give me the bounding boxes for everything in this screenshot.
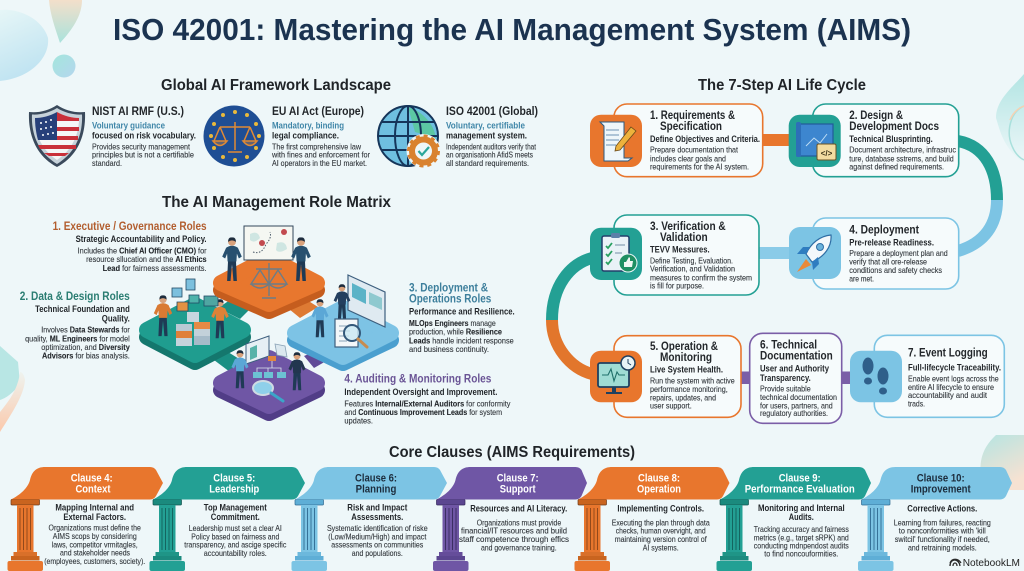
pillar bbox=[292, 500, 327, 571]
text: step 2: Technical Blusprinting. bbox=[849, 134, 933, 144]
text: clause 6: and populations. bbox=[352, 549, 403, 558]
text: clause 9: conducting mdnpendost audits bbox=[754, 542, 849, 551]
icon: document and pencil bbox=[590, 115, 642, 167]
banner bbox=[436, 467, 587, 500]
pillar bbox=[858, 500, 894, 571]
text: step 1: Specification bbox=[660, 121, 722, 133]
text: clause 7 bbox=[459, 504, 569, 552]
icon: floating data cards bbox=[172, 279, 218, 311]
text: clause 5 bbox=[184, 503, 286, 558]
label: ISO text: management system. bbox=[446, 130, 527, 140]
icon: globe and gear bbox=[378, 106, 440, 168]
text: clause 6: Assessments. bbox=[351, 512, 403, 522]
figure: two data staff bbox=[154, 295, 229, 338]
text: step 7: Enable event logs across the bbox=[908, 374, 999, 383]
title: ISO 42001: Mastering the AI Management System (AIMS) bbox=[113, 12, 911, 47]
banner: Clause 7: bbox=[497, 473, 539, 485]
panel: role matrix diagram bbox=[147, 226, 391, 413]
icon: checklist and thumbs up bbox=[590, 228, 642, 280]
label: EU text: AI operators in the EU market. bbox=[272, 159, 367, 168]
icon: scales of accountability bbox=[251, 263, 287, 298]
text: clause 10: Learning from failures, reacting bbox=[894, 518, 991, 527]
role text: deployment and operations: Operations Roles bbox=[409, 294, 491, 306]
role text: deployment and operations: production, while Resilience bbox=[409, 328, 503, 337]
role text: data and design: Technical Foundation and bbox=[35, 304, 130, 314]
background blob: right bbox=[996, 74, 1024, 164]
icon: data blocks bbox=[176, 312, 210, 346]
text: clause 6: Systematic identification of riske bbox=[327, 524, 428, 533]
text: clause 10 bbox=[894, 504, 991, 552]
banner bbox=[295, 467, 447, 500]
role text: executive governance: Strategic Accountability and Policy. bbox=[76, 234, 207, 244]
text: step 6: Transparency. bbox=[760, 373, 811, 383]
label: NIST text: principles but is not a certifiable bbox=[92, 151, 195, 160]
figure: two operations staff bbox=[311, 284, 350, 337]
label: ISO text: all standard requirements. bbox=[446, 159, 529, 168]
icon: clipboard and magnifier bbox=[335, 319, 367, 347]
text: clause 5: transparency, and ascige specific bbox=[184, 541, 286, 550]
background blob: left bbox=[0, 346, 25, 432]
role text: auditing and monitoring: Features Internal/External Auditors for conformity bbox=[344, 399, 510, 408]
text: step 1: Define Objectives and Criteria. bbox=[650, 134, 760, 144]
heading: Core Clauses: Core Clauses (AIMS Requirements) bbox=[389, 444, 635, 461]
step 3: verification and validation bbox=[590, 215, 759, 295]
role text: deployment and operations bbox=[409, 283, 515, 354]
text: clause 4: Mapping Internal and bbox=[55, 503, 134, 513]
role text: auditing and monitoring: Independent Oversight and Improvement. bbox=[344, 387, 497, 397]
banner: Context bbox=[76, 484, 111, 496]
text: clause 7: financial/IT resources and build bbox=[461, 527, 567, 536]
clause 10: improvement bbox=[858, 467, 1012, 571]
icon: analytics screen bbox=[246, 336, 287, 364]
text: step 6 bbox=[760, 339, 837, 418]
clause 7: support bbox=[433, 467, 587, 571]
banner: Clause 9: bbox=[779, 473, 821, 485]
label: EU text bbox=[271, 106, 370, 168]
step 5: operation and monitoring bbox=[590, 336, 741, 417]
text: step 7: Full-lifecycle Traceability. bbox=[908, 363, 1001, 373]
text: step 7: trads. bbox=[908, 399, 925, 408]
icon: strategy whiteboard bbox=[244, 226, 293, 260]
role text: executive governance: resource sllucation and the AI Ethics bbox=[86, 255, 207, 264]
role text: auditing and monitoring bbox=[344, 374, 510, 426]
text: clause 9: Monitoring and Internal bbox=[758, 503, 845, 513]
role text: executive governance: 1. Executive / Governance Roles bbox=[53, 221, 207, 233]
banner bbox=[11, 467, 163, 500]
text: clause 4: Organizations must define the bbox=[49, 524, 141, 533]
role text: deployment and operations: Leads handle incident response bbox=[409, 336, 514, 345]
text: step 4: verify that all ore-release bbox=[849, 258, 928, 267]
role text: deployment and operations: Performance and Resilience. bbox=[409, 307, 515, 317]
connectors between role platforms bbox=[214, 300, 328, 372]
text: clause 10: to nonconformities with 'kill bbox=[899, 527, 986, 536]
text: step 5: Monitoring bbox=[660, 352, 712, 364]
icon: magnifier bbox=[253, 381, 283, 401]
text: step 5: Live System Health. bbox=[650, 365, 723, 375]
text: step 1: Prepare documentation that bbox=[650, 146, 739, 155]
icon: US flag shield bbox=[29, 105, 85, 167]
banner: Clause 5: bbox=[213, 473, 255, 485]
text: clause 6: assessments on communities bbox=[331, 541, 423, 550]
role text: data and design bbox=[20, 291, 130, 361]
text: step 5 bbox=[650, 341, 735, 411]
banner: Performance Evaluation bbox=[745, 484, 855, 496]
text: step 4: are met. bbox=[849, 275, 874, 284]
heading: The 7-Step AI Life Cycle: The 7-Step AI Life Cycle bbox=[698, 77, 866, 94]
label: EU text: with fines and enforcement for bbox=[271, 151, 370, 160]
banner: Support bbox=[500, 484, 536, 496]
banner: Clause 4: bbox=[71, 473, 113, 485]
panel: NIST AI RMF bbox=[29, 105, 196, 168]
text: step 3: Define Testing, Evaluation. bbox=[650, 256, 733, 265]
banner: Clause 8: bbox=[638, 473, 680, 485]
text: clause 8 bbox=[612, 504, 710, 552]
role text: deployment and operations: MLOps Engineers manage bbox=[409, 319, 496, 328]
clause 4: context bbox=[8, 467, 163, 571]
text: step 6: technical documentation bbox=[760, 393, 837, 402]
role text: deployment and operations: and business continuity. bbox=[409, 345, 489, 354]
icon: dashboard bbox=[348, 275, 385, 327]
text: clause 7: Organizations must provide bbox=[477, 519, 562, 528]
heading: The AI Management Role Matrix: The AI Management Role Matrix bbox=[162, 194, 391, 211]
label: EU text: Mandatory, binding bbox=[272, 120, 344, 130]
text: clause 7: staff competence through effics bbox=[459, 535, 569, 544]
text: step 3: Verification, and Validation bbox=[650, 265, 735, 274]
NotebookLM logo: NotebookLM bbox=[963, 557, 1020, 569]
text: step 4: 4. Deployment bbox=[849, 225, 919, 237]
role text: auditing and monitoring: updates. bbox=[344, 417, 373, 426]
text: clause 4: laws, competitor vrmitagles, bbox=[52, 540, 138, 549]
text: clause 6: Risk and Impact bbox=[347, 503, 407, 513]
banner bbox=[153, 467, 305, 500]
text: clause 4: and stakeholder needs bbox=[60, 549, 130, 558]
banner bbox=[862, 467, 1012, 500]
icon: footprints bbox=[850, 351, 902, 402]
step 4: deployment bbox=[789, 218, 959, 289]
role text: data and design: quality, ML Engineers for model bbox=[25, 334, 130, 343]
pillar bbox=[433, 500, 468, 571]
text: step 6: regulatory authorities. bbox=[760, 409, 828, 418]
banner: Planning bbox=[356, 484, 396, 496]
text: step 6: for users, partners, and bbox=[760, 401, 833, 410]
label: NIST text: focused on risk vocabulary. bbox=[92, 130, 196, 140]
figure: two executives bbox=[222, 237, 311, 281]
figure: two auditors bbox=[231, 350, 306, 390]
text: step 6: 6. Technical bbox=[760, 339, 817, 351]
text: step 2: against defined requirements. bbox=[849, 163, 944, 172]
pillar bbox=[150, 500, 185, 571]
text: step 1: requirements for the AI system. bbox=[650, 163, 749, 172]
role text: data and design: optimization, and Diversity bbox=[41, 343, 130, 352]
text: clause 4: (employees, customers, society). bbox=[44, 557, 145, 566]
label: NIST text: NIST AI RMF (U.S.) bbox=[92, 106, 184, 118]
text: step 3: TEVV Messures. bbox=[650, 244, 710, 254]
text: step 2: Development Docs bbox=[849, 121, 939, 133]
text: step 4: conditions and safety checks bbox=[849, 266, 942, 275]
text: step 3: 3. Verification & bbox=[650, 221, 726, 233]
text: step 2 bbox=[849, 110, 956, 172]
label: ISO text: Independent auditors verify that bbox=[446, 142, 537, 151]
text: clause 7: Resources and AI Literacy. bbox=[470, 504, 567, 514]
text: clause 5: accountability roles. bbox=[204, 549, 267, 558]
icon: EU scales bbox=[204, 106, 264, 166]
icon: monitor with heartbeat and clock bbox=[590, 351, 642, 402]
icon: org chart bbox=[253, 356, 286, 378]
banner: Leadership bbox=[209, 484, 260, 496]
step 6: technical documentation bbox=[750, 333, 842, 423]
role text: auditing and monitoring: 4. Auditing & Monitoring Roles bbox=[344, 374, 491, 386]
text: clause 9: Audits. bbox=[789, 512, 814, 522]
banner: Clause 6: bbox=[355, 473, 397, 485]
text: step 7: entire AI lifecycle to ensure bbox=[908, 383, 995, 392]
role text: executive governance: Includes the Chief AI Officer (CMO) for bbox=[78, 246, 207, 255]
text: clause 8: AI systems. bbox=[643, 543, 679, 552]
text: step 3: Validation bbox=[660, 232, 708, 244]
text: step 1: includes clear goals and bbox=[650, 154, 726, 163]
text: step 3: is fill for purpose. bbox=[650, 282, 704, 291]
text: step 7: accountability and audit bbox=[908, 391, 988, 400]
text: step 2: Document architecture, infrastruc bbox=[849, 146, 956, 155]
label: EU text: legal compliance. bbox=[272, 130, 339, 140]
text: clause 5: Policy based on fairness and bbox=[191, 532, 279, 541]
text: clause 9 bbox=[754, 503, 849, 559]
text: clause 4: AIMS scops by considering bbox=[53, 532, 137, 541]
text: clause 8: maintaining version control of bbox=[615, 535, 707, 544]
text: step 6: Documentation bbox=[760, 351, 833, 363]
text: clause 5: Commitment. bbox=[211, 512, 260, 522]
label: ISO text bbox=[446, 106, 538, 168]
text: step 5: Run the system with active bbox=[650, 376, 735, 385]
text: step 2: 2. Design & bbox=[849, 110, 903, 122]
label: ISO text: ISO 42001 (Global) bbox=[446, 106, 538, 118]
text: step 7 bbox=[908, 348, 1001, 408]
icon: blueprint and code: </> bbox=[821, 149, 833, 158]
clause 5: leadership bbox=[150, 467, 305, 571]
text: clause 9: Tracking accuracy and fairness bbox=[754, 525, 849, 534]
panel: EU AI Act bbox=[204, 106, 370, 168]
role text: executive governance: Lead for fairness assessments. bbox=[103, 264, 207, 273]
banner: Operation bbox=[637, 484, 681, 496]
text: step 5: repairs, updates, and bbox=[650, 393, 716, 402]
text: step 3: measures to confirm the system bbox=[650, 273, 752, 282]
platform: data and design bbox=[147, 279, 243, 362]
role text: deployment and operations: 3. Deployment & bbox=[409, 283, 488, 295]
text: clause 8: checks, human overvight, and bbox=[616, 527, 706, 536]
step 2: design and development docs bbox=[789, 104, 959, 177]
text: step 1: 1. Requirements & bbox=[650, 110, 735, 122]
banner bbox=[720, 467, 871, 500]
role text: executive governance bbox=[53, 221, 207, 273]
text: step 4 bbox=[849, 225, 948, 284]
text: step 2: ture, database sstrems, and build bbox=[849, 154, 954, 163]
label: NIST text bbox=[92, 106, 196, 168]
clause 6: planning bbox=[292, 467, 447, 571]
label: NIST text: Provides security management bbox=[92, 142, 191, 151]
background blob: bottom right bbox=[980, 435, 1024, 490]
text: clause 8: Executing the plan through data bbox=[612, 518, 710, 527]
text: step 3 bbox=[650, 221, 752, 291]
text: clause 10: and retraining models. bbox=[908, 543, 977, 552]
text: clause 4 bbox=[44, 503, 145, 566]
label: NIST text: standard. bbox=[92, 159, 122, 168]
text: clause 5: Top Management bbox=[204, 503, 267, 513]
text: clause 10: switcil' functionality if needed, bbox=[895, 535, 990, 544]
label: EU text: EU AI Act (Europe) bbox=[272, 106, 364, 118]
icon: blueprint and code bbox=[789, 115, 841, 167]
text: clause 6 bbox=[327, 503, 428, 558]
text: step 5: user support. bbox=[650, 402, 692, 411]
pillar bbox=[574, 500, 610, 571]
role text: auditing and monitoring: and Continuous Improvement Leads for system bbox=[344, 408, 502, 417]
text: step 4: Pre-release Readiness. bbox=[849, 238, 934, 248]
text: step 5: performance monitoring, bbox=[650, 385, 728, 394]
text: step 7: 7. Event Logging bbox=[908, 348, 988, 360]
text: step 5: 5. Operation & bbox=[650, 341, 718, 353]
heading: Global AI Framework Landscape: Global AI Framework Landscape bbox=[161, 77, 391, 94]
text: clause 5: Leadership must set a clear AI bbox=[189, 524, 282, 533]
platform: auditing and monitoring bbox=[221, 336, 317, 413]
banner: Clause 10: bbox=[917, 473, 965, 485]
text: step 6: User and Authority bbox=[760, 364, 830, 374]
text: step 6: Provide suitable bbox=[760, 385, 811, 394]
panel: ISO 42001 bbox=[378, 106, 538, 168]
label: ISO text: an organisationh AfidS meets bbox=[446, 151, 533, 160]
background blob: top left bbox=[0, 0, 82, 81]
life cycle connectors bbox=[552, 134, 997, 384]
step 7: event logging bbox=[850, 335, 1004, 417]
role text: data and design: 2. Data & Design Roles bbox=[20, 291, 130, 303]
banner bbox=[578, 467, 730, 500]
text: clause 6: (Low/Medium/High) and impact bbox=[328, 532, 427, 541]
banner: Improvement bbox=[911, 484, 971, 496]
label: ISO text: Voluntary, certifiable bbox=[446, 120, 525, 130]
clause 8: operation bbox=[574, 467, 730, 571]
label: NIST text: Voluntary guidance bbox=[92, 120, 165, 130]
text: clause 4: External Factors. bbox=[63, 512, 126, 522]
text: clause 7: and governance training. bbox=[481, 543, 557, 552]
icon: rocket bbox=[789, 227, 841, 279]
text: step 1 bbox=[650, 110, 760, 172]
platform: deployment and operations bbox=[295, 275, 391, 363]
text: clause 9: to find noncouformities. bbox=[764, 550, 838, 559]
text: step 4: Prepare a deployment plan and bbox=[849, 249, 948, 258]
text: clause 8: Implementing Controls. bbox=[617, 504, 704, 514]
pillar bbox=[716, 500, 752, 571]
text: clause 10: Corrective Actions. bbox=[907, 504, 977, 514]
clause 9: performance evaluation bbox=[716, 467, 871, 571]
role text: data and design: Involves Data Stewards for bbox=[41, 326, 130, 335]
role text: data and design: Quality. bbox=[102, 313, 130, 323]
step 1: requirements and specification bbox=[590, 104, 763, 177]
platform: executive and governance bbox=[221, 226, 317, 311]
label: EU text: The first comprehensive law bbox=[272, 142, 361, 151]
role text: data and design: Advisors for bias analysis. bbox=[42, 352, 130, 361]
pillar bbox=[8, 500, 43, 571]
text: clause 9: metrics (e.g., target sRPK) and bbox=[754, 533, 849, 542]
